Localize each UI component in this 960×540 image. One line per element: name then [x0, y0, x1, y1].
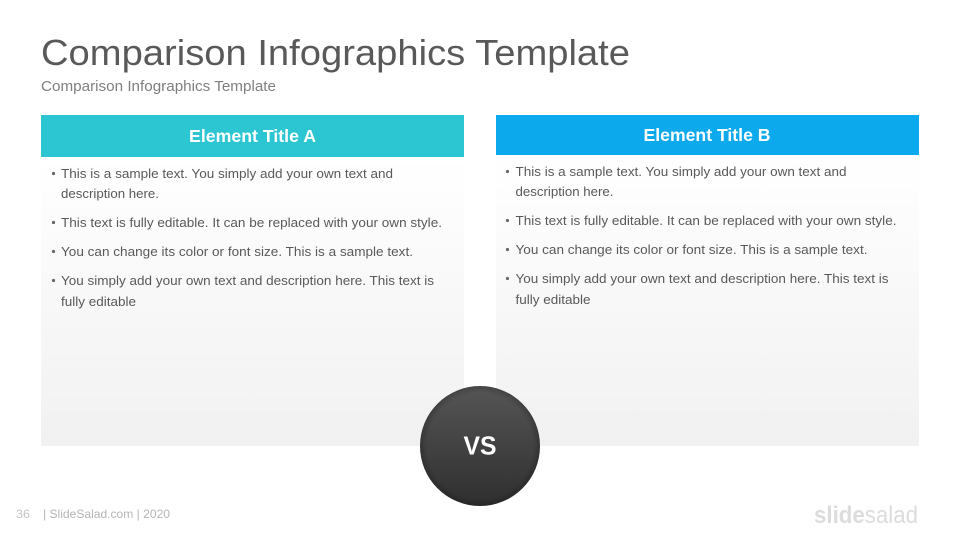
panel A bullet list: You simply add your own text and description here. This text is	[61, 273, 435, 288]
panel A bullet list: You can change its color or font size. This is a sample text.	[61, 244, 413, 259]
VS badge	[420, 386, 540, 506]
title: Comparison Infographics Template	[41, 32, 630, 73]
panel A bullet list	[52, 166, 442, 309]
subtitle: Comparison Infographics Template	[41, 79, 276, 95]
panel B bullet list: fully editable	[516, 292, 590, 307]
footer text: | SlideSalad.com | 2020	[43, 507, 170, 521]
panel A bullet list: fully editable	[61, 294, 136, 309]
panel B heading: Element Title B	[644, 125, 770, 145]
panel A heading: Element Title A	[189, 126, 316, 146]
panel A header	[41, 115, 464, 157]
panel A background	[41, 157, 464, 446]
panel: element A	[41, 115, 464, 446]
panel A bullet list: description here.	[61, 186, 159, 201]
panel A bullet list: This is a sample text. You simply add your own text and	[61, 166, 393, 181]
VS badge: VS	[464, 430, 496, 460]
panel B bullet list: description here.	[516, 184, 614, 199]
panel B bullet list: This text is fully editable. It can be replaced with your own style.	[516, 213, 896, 228]
panel B header	[496, 115, 919, 155]
page number: 36	[16, 507, 30, 521]
panel A bullet list: This text is fully editable. It can be replaced with your own style.	[61, 215, 442, 230]
panel B bullet list: You simply add your own text and description here. This text is	[516, 271, 889, 286]
panel: element B	[496, 115, 919, 446]
logo wordmark: slidesalad	[814, 502, 918, 529]
panel B bullet list: You can change its color or font size. This is a sample text.	[516, 242, 868, 257]
panel B background	[496, 155, 919, 446]
panel B bullet list	[506, 164, 896, 307]
panel B bullet list: This is a sample text. You simply add your own text and	[516, 164, 846, 179]
